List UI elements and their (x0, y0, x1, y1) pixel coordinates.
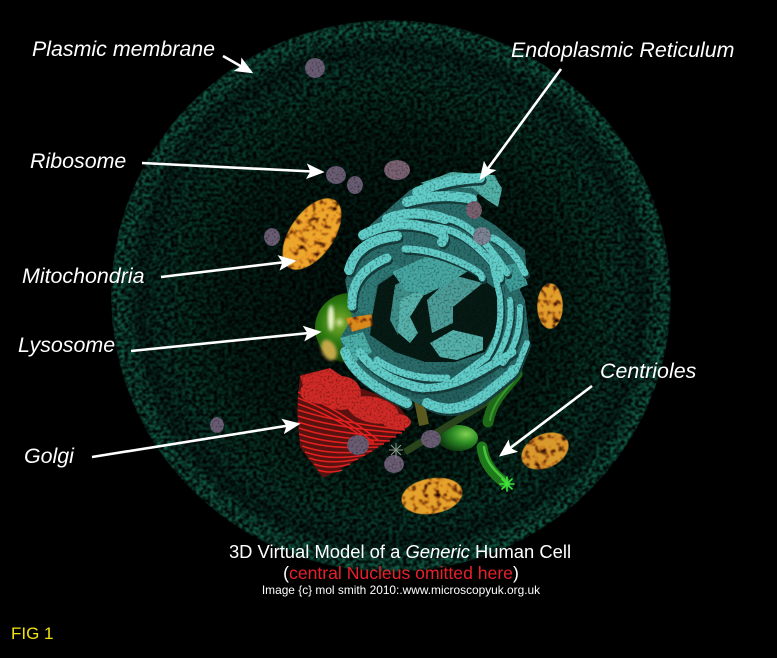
image credit: Image {c} mol smith 2010:.www.microscopyuk.org.uk (262, 583, 540, 597)
endoplasmic reticulum (340, 172, 530, 412)
mitochondrion right (537, 283, 563, 329)
arrow: Golgi (92, 424, 298, 457)
reticulum silhouette (340, 172, 530, 412)
reticulum bright arcs (345, 178, 527, 409)
arrow: Ribosome (142, 163, 322, 172)
caption (229, 541, 571, 597)
mitochondrion bottom (398, 473, 466, 519)
label: Ribosome: Ribosome (30, 149, 126, 173)
label: Endoplasmic Reticulum: Endoplasmic Reticulum (511, 38, 735, 62)
centriole star (500, 477, 514, 491)
arrow: Mitochondria (161, 261, 294, 277)
centrioles (482, 374, 519, 491)
figure label: FIG 1 (11, 624, 54, 643)
label: Plasmic membrane: Plasmic membrane (32, 37, 215, 61)
cell membrane and cytoplasm (111, 20, 671, 572)
arrow: Centrioles (501, 386, 592, 455)
label: Centrioles: Centrioles (600, 359, 697, 383)
label: Mitochondria: Mitochondria (22, 264, 145, 288)
caption title: 3D Virtual Model of a Generic Human Cell (229, 541, 571, 562)
golgi top lobes (300, 368, 411, 430)
reticulum arc shadows (346, 180, 528, 411)
golgi apparatus (297, 368, 411, 478)
arrow: Lysosome (131, 332, 319, 351)
microtubule strands (405, 395, 490, 452)
nucleus cavity (370, 262, 497, 362)
arrow: Endoplasmic Reticulum (481, 69, 561, 178)
small star centriole (389, 443, 403, 458)
ribosomes and vesicles (210, 58, 491, 473)
label: Lysosome: Lysosome (18, 333, 115, 357)
green vesicle (438, 425, 478, 451)
caption note: (central Nucleus omitted here) (283, 563, 519, 583)
lysosome (315, 293, 385, 363)
label: Golgi: Golgi (24, 444, 75, 468)
arrow: Plasmic membrane (223, 56, 251, 72)
mitochondrion upper left (270, 188, 354, 280)
reticulum slabs (340, 172, 528, 405)
small mitochondrion behind reticulum (345, 314, 373, 332)
mitochondrion lower right (515, 425, 575, 477)
